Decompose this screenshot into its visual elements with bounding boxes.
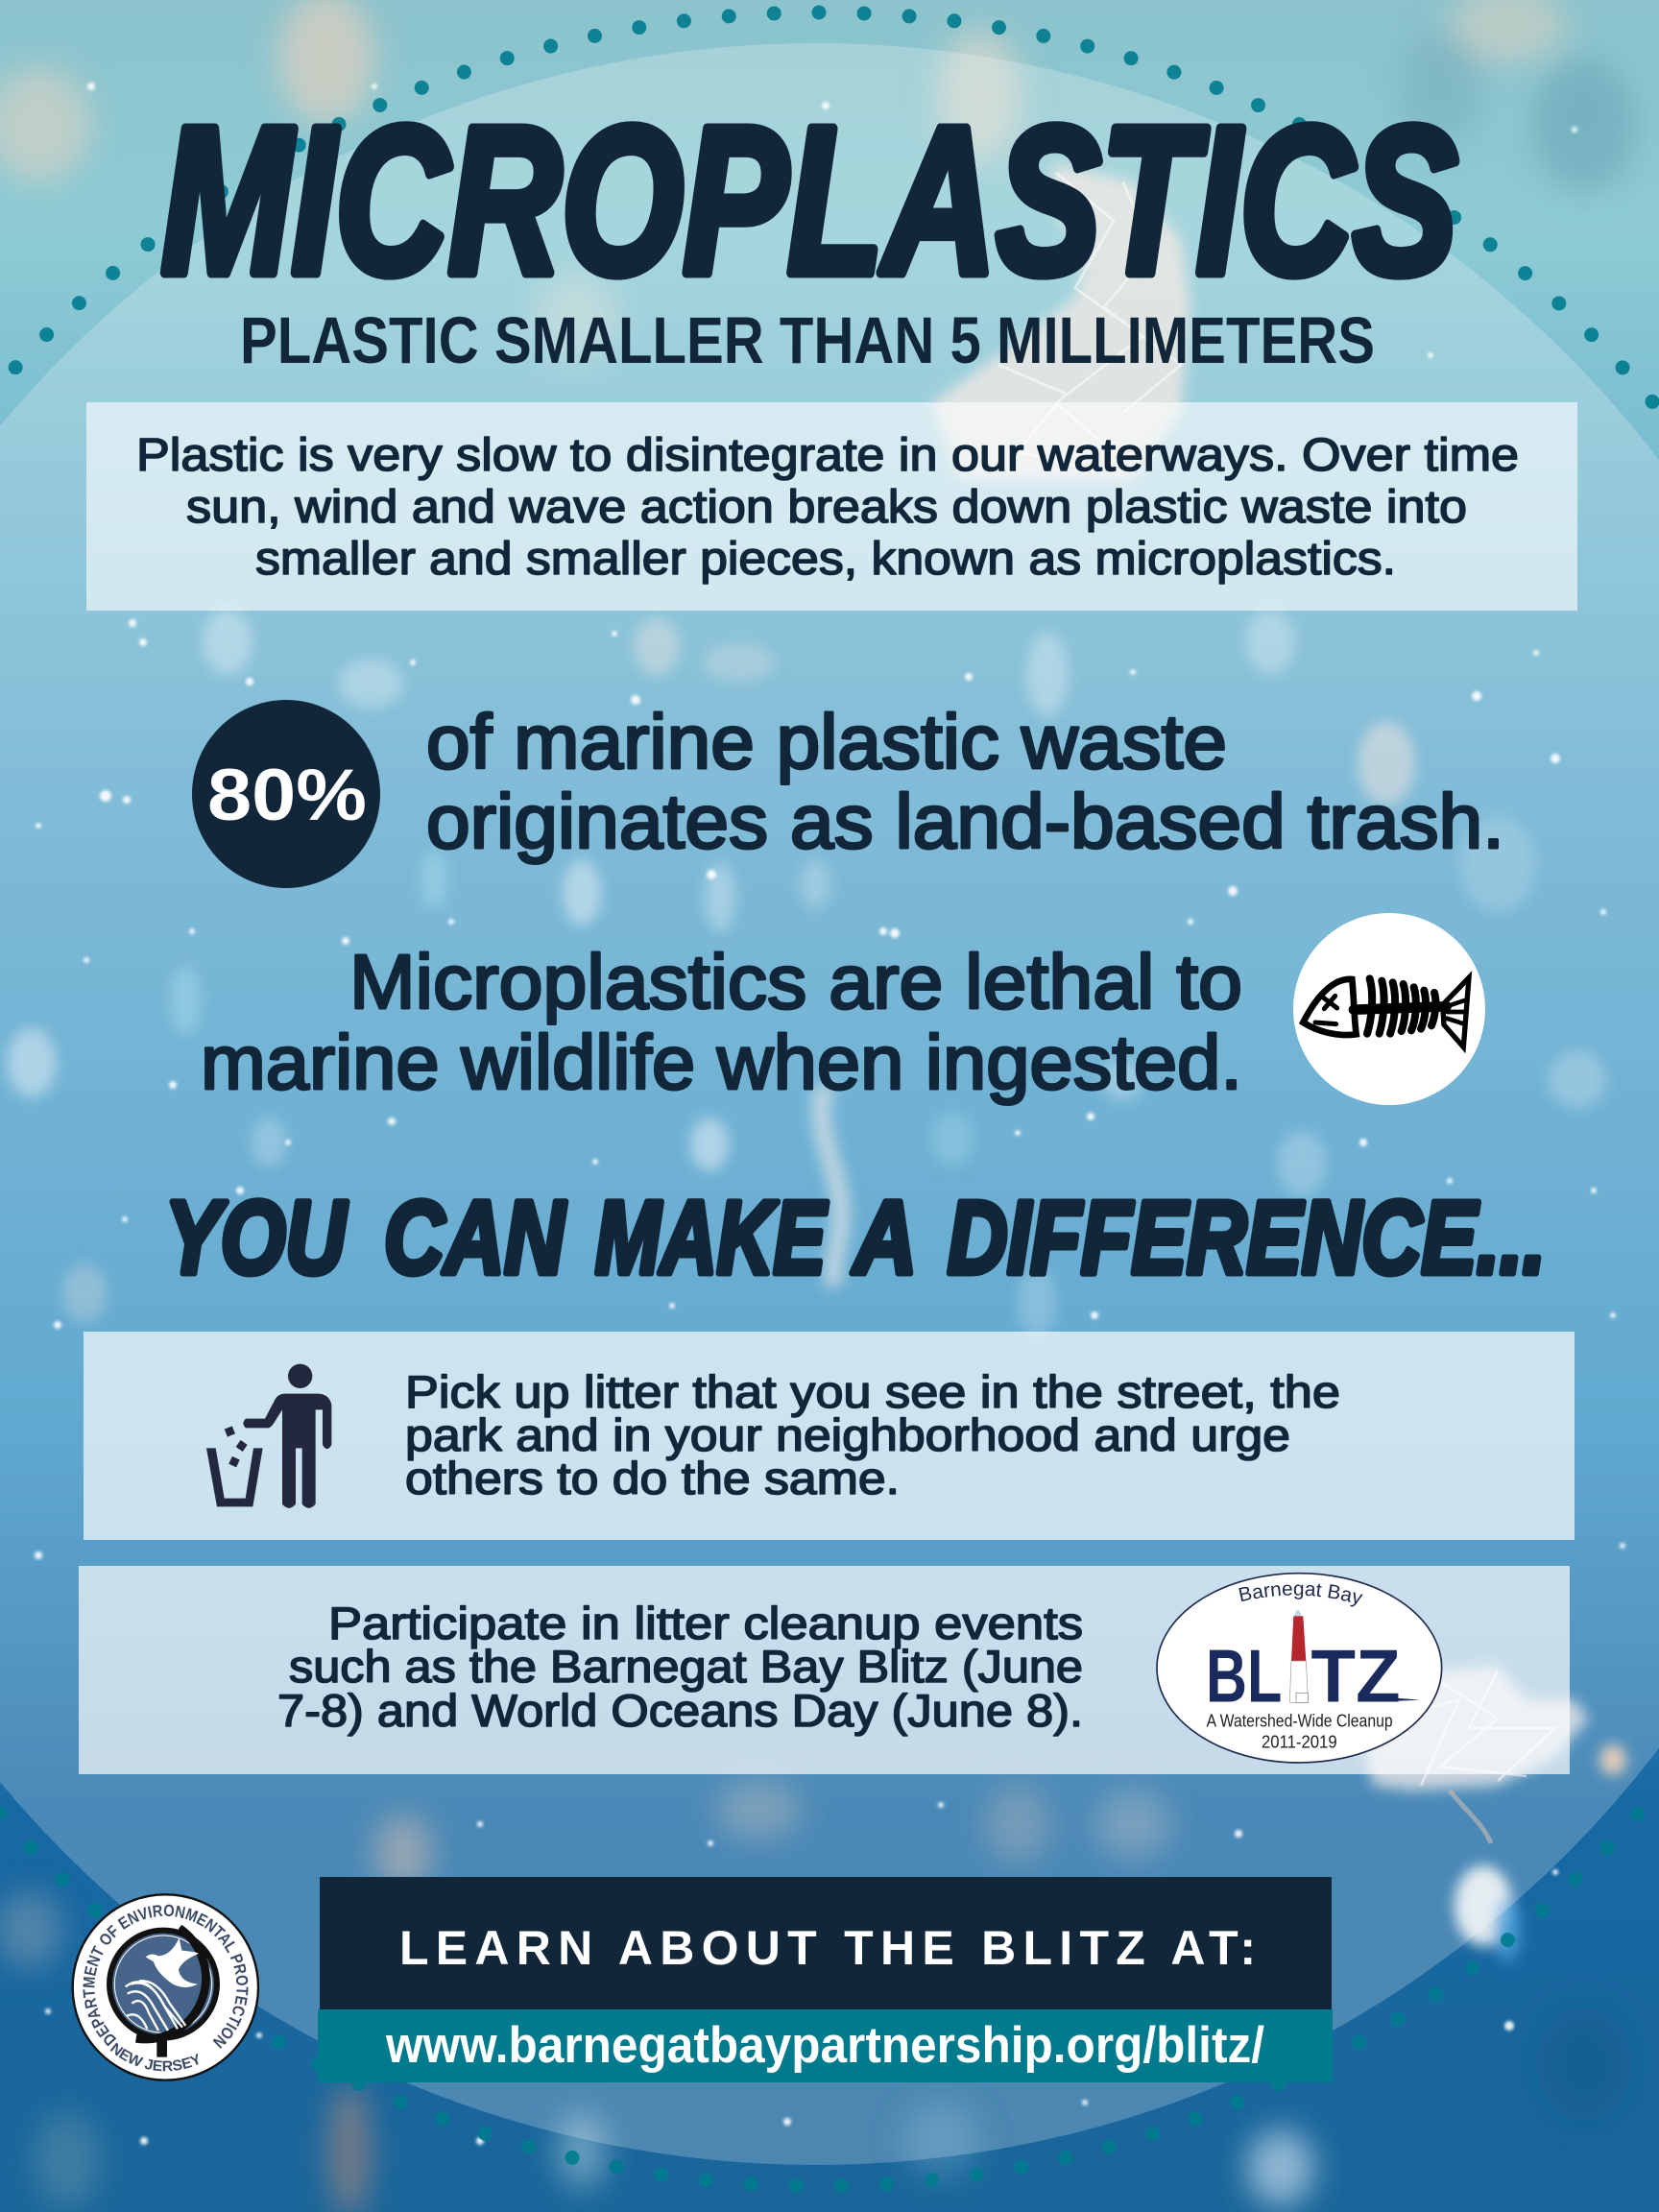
panel: pick up litter: Pick up litter that you see in the street, the	[405, 1366, 1340, 1417]
heading: call to action	[165, 1179, 1546, 1295]
subtitle: PLASTIC SMALLER THAN 5 MILLIMETERS	[240, 303, 1375, 377]
stat text: lethal to wildlife: marine wildlife when ingested.	[201, 1020, 1242, 1105]
panel: definition: Plastic is very slow to disintegrate in our waterways. Over time	[136, 430, 1519, 481]
footer banner: website url: www.barnegatbaypartnership.org/blitz/	[385, 2017, 1264, 2074]
fishing net fragments	[821, 163, 1589, 1843]
logo: Barnegat Bay Blitz: 2011-2019	[1262, 1732, 1337, 1752]
stat text: land-based trash: originates as land-based trash.	[426, 779, 1504, 864]
panel: pick up litter: park and in your neighborhood and urge	[405, 1409, 1290, 1460]
icon: person dropping litter in bin	[206, 1364, 331, 1508]
stat text: lethal to wildlife	[201, 939, 1242, 1105]
logo: Barnegat Bay Blitz: A Watershed-Wide Cleanup	[1207, 1710, 1393, 1730]
panel: definition	[86, 402, 1577, 611]
panel: cleanup events: such as the Barnegat Bay Blitz (June	[289, 1641, 1083, 1692]
stat badge: 80%	[192, 700, 380, 888]
footer banner: learn about the blitz	[320, 1877, 1332, 2009]
stat text: lethal to wildlife: Microplastics are lethal to	[349, 939, 1242, 1024]
panel: pick up litter	[84, 1332, 1575, 1540]
logo: NJ Department of Environmental Protection: DEPARTMENT OF ENVIRONMENTAL PROTECTION	[83, 1905, 248, 2049]
logo: Barnegat Bay Blitz: Barnegat Bay	[1238, 1584, 1363, 1607]
heading: call to action: YOU	[165, 1179, 348, 1295]
panel: pick up litter: others to do the same.	[405, 1453, 900, 1503]
stat text: land-based trash: of marine plastic waste	[426, 699, 1227, 784]
panel: definition: smaller and smaller pieces, known as microplastics.	[255, 534, 1396, 585]
panel: cleanup events	[79, 1566, 1570, 1774]
stat text: land-based trash	[426, 699, 1504, 864]
logo: Barnegat Bay Blitz	[1156, 1573, 1442, 1764]
logo: Barnegat Bay Blitz: TZ	[1310, 1634, 1401, 1719]
stat badge: 80%: 80%	[207, 755, 367, 836]
logo: Barnegat Bay Blitz: BL	[1206, 1634, 1282, 1719]
panel: cleanup events: 7-8) and World Oceans Day (June 8).	[277, 1685, 1083, 1736]
footer banner: learn about the blitz: LEARN ABOUT THE BLITZ AT:	[399, 1921, 1256, 1975]
heading: call to action: CAN	[384, 1179, 566, 1295]
icon: dead fish	[1293, 913, 1485, 1105]
panel: definition: sun, wind and wave action breaks down plastic waste into	[186, 482, 1467, 533]
heading: call to action: MAKE	[595, 1179, 828, 1295]
heading: call to action: A	[851, 1179, 917, 1295]
logo: NJ Department of Environmental Protection: NEW JERSEY	[109, 2043, 199, 2072]
panel: cleanup events: Participate in litter cleanup events	[328, 1598, 1083, 1648]
